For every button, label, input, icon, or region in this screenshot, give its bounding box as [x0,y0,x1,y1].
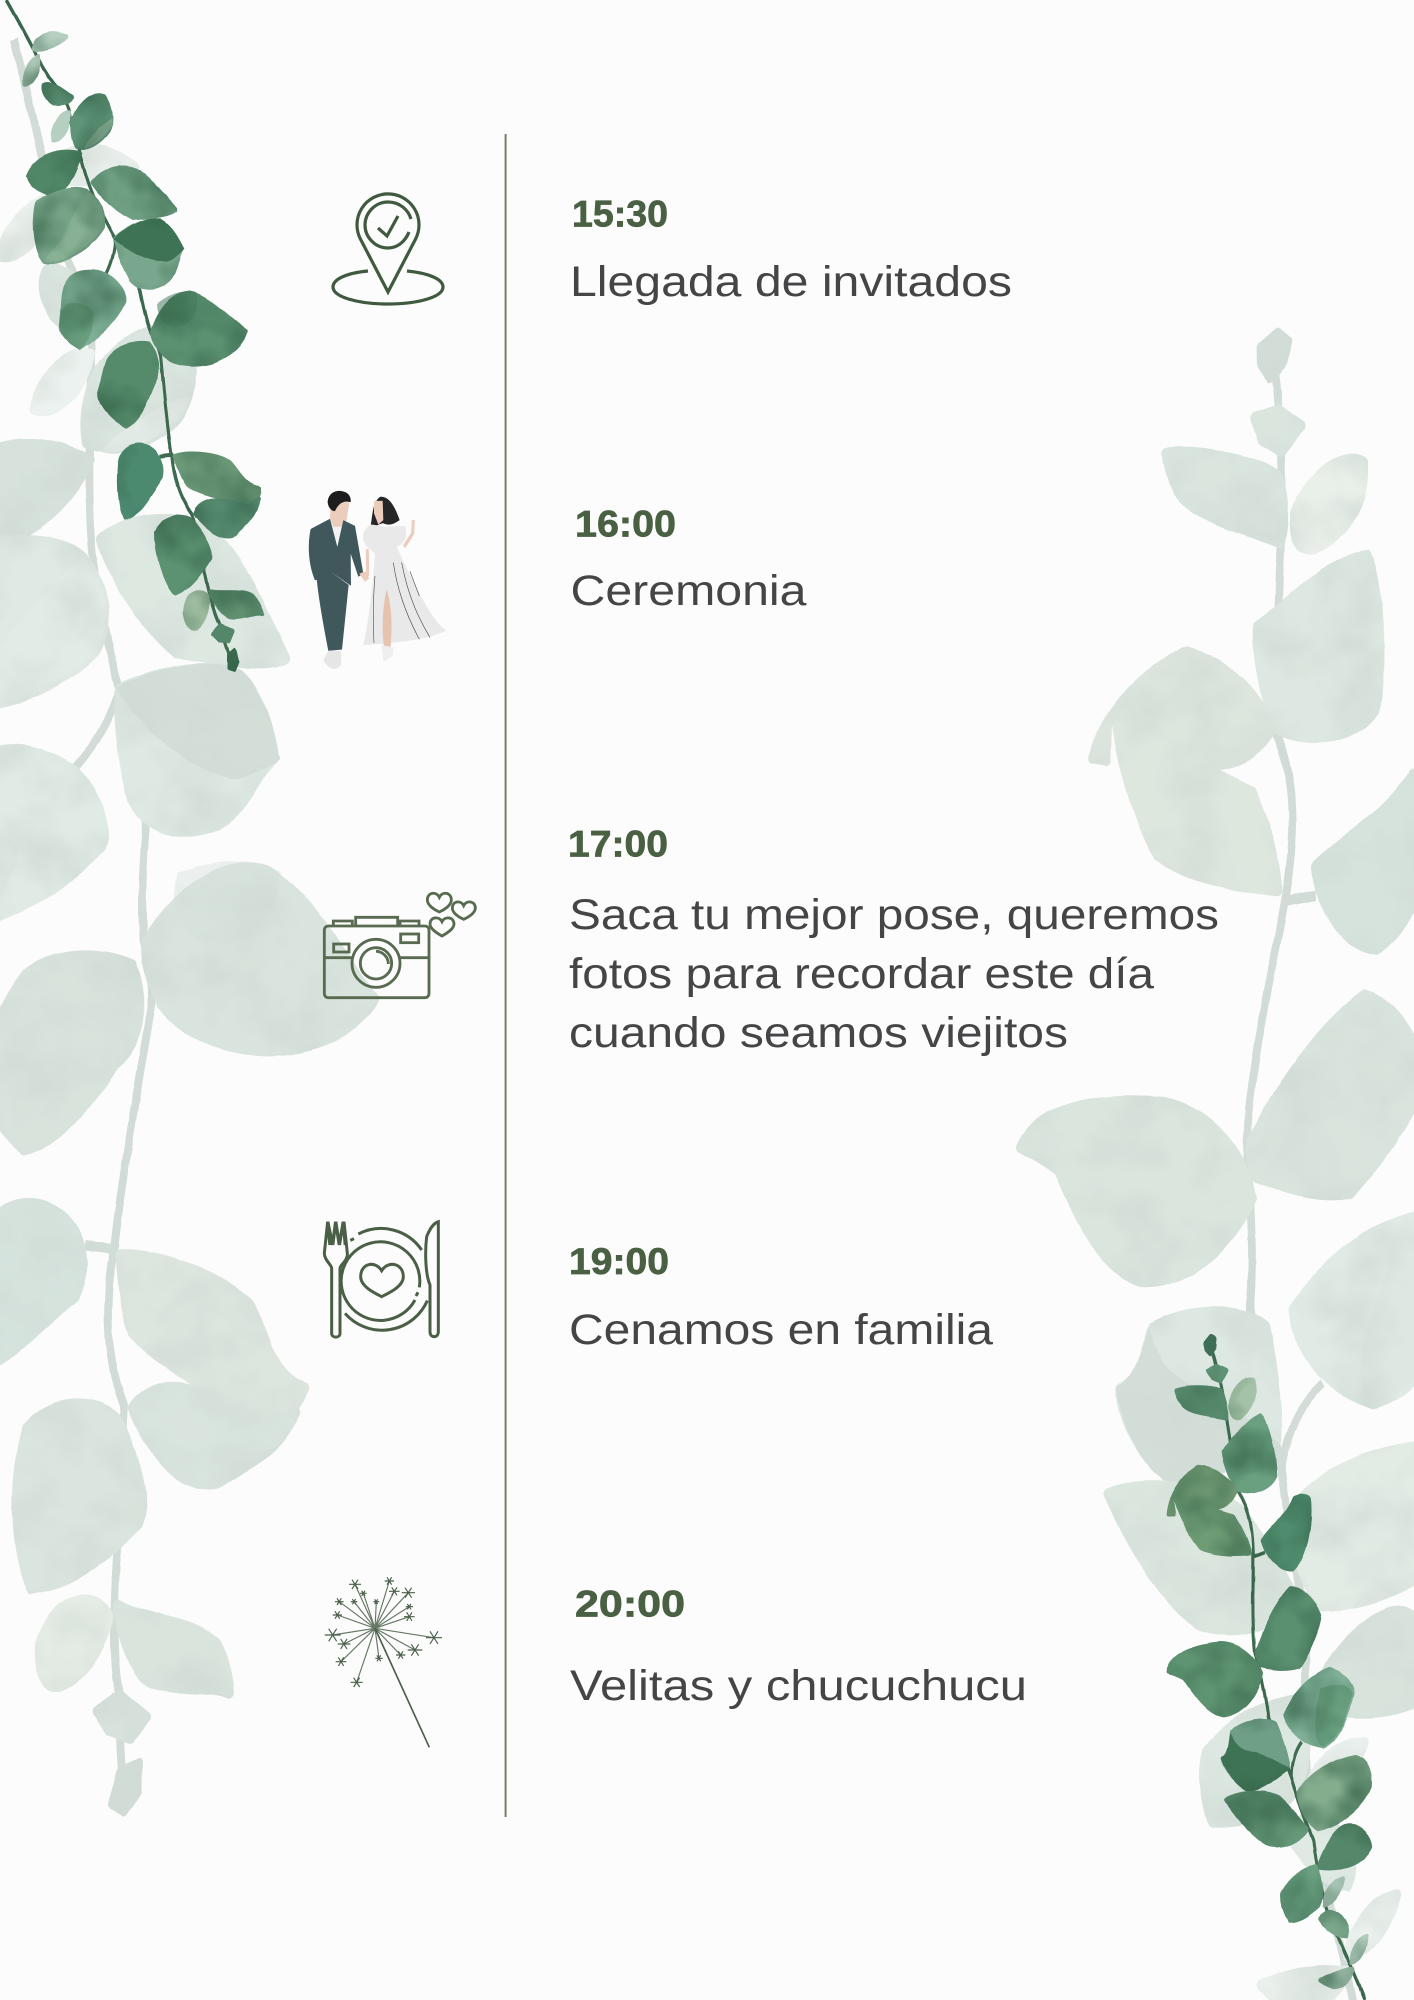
timeline vertical line [505,134,507,1817]
icon: location pin [333,194,443,304]
description: Ceremonia [570,567,807,615]
description: Velitas y chucuchucu [570,1662,1027,1710]
groom [309,491,369,669]
description: fotos para recordar este día [569,950,1154,998]
description: cuando seamos viejitos [569,1009,1068,1057]
event: 17:00 [568,823,1219,1057]
time: 15:30 [572,194,668,235]
green eucalyptus branch: top left [7,0,263,670]
icon: plate with fork and knife [324,1222,438,1337]
time: 17:00 [568,823,668,864]
icon: bride and groom [309,491,447,669]
description [569,891,1219,1057]
description: Llegada de invitados [570,258,1012,306]
time: 19:00 [569,1241,669,1282]
time: 16:00 [575,504,676,545]
time: 20:00 [575,1584,685,1625]
faded background branch: left [0,39,634,1830]
description: Cenamos en familia [569,1306,993,1354]
event: 15:30 [570,194,1012,306]
description: Saca tu mejor pose, queremos [569,891,1219,939]
icon: sparkler [325,1577,442,1747]
bride [363,497,447,662]
faded background branch: right [873,313,1414,2000]
icon: camera with hearts [324,893,475,998]
green eucalyptus branch: bottom right [1167,1336,1371,2000]
event: 19:00 [569,1241,993,1354]
event: 20:00 [570,1584,1027,1710]
event: 16:00 [570,504,807,615]
